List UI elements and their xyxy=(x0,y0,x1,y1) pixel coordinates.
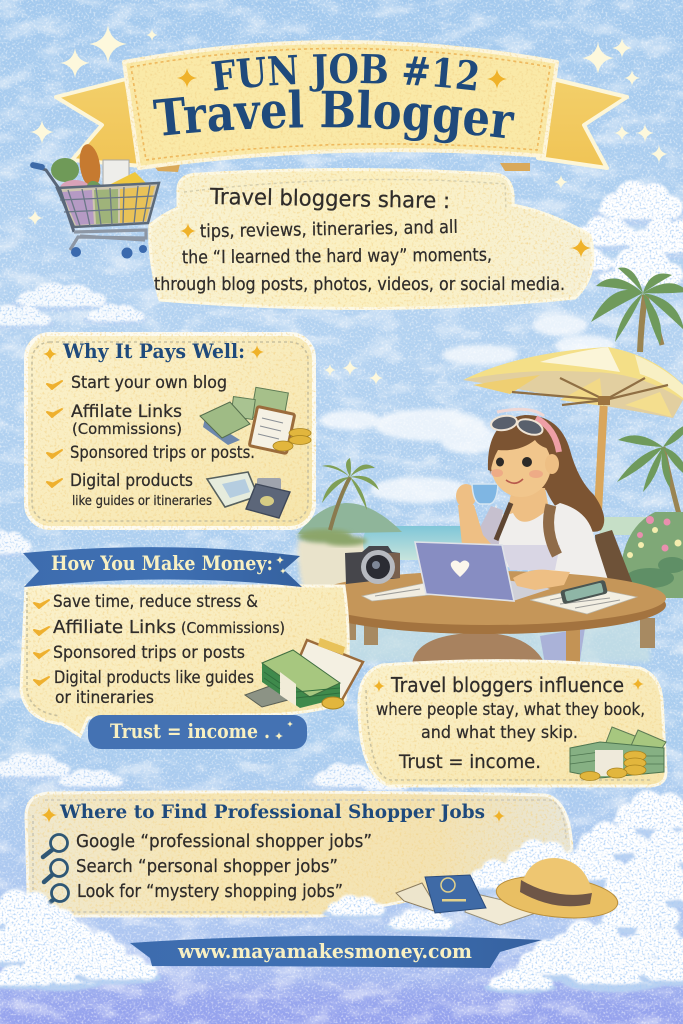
typing hand xyxy=(513,570,570,590)
papers on table xyxy=(362,583,637,614)
search lines xyxy=(76,831,372,902)
checklist: Affilate Links xyxy=(71,402,182,422)
intro line 1: tips, reviews, itineraries, and all xyxy=(200,217,458,242)
chair xyxy=(595,530,634,590)
panel: why it pays well xyxy=(26,334,314,528)
icon: passport and papers xyxy=(396,875,545,925)
distant shore xyxy=(600,517,683,535)
panel shape xyxy=(21,586,348,736)
intro panel xyxy=(150,170,593,309)
panel shape xyxy=(359,661,666,786)
checklist: Digital products xyxy=(70,471,193,491)
water below table xyxy=(335,622,650,662)
left tail xyxy=(56,79,142,166)
sea xyxy=(363,526,535,560)
checklist: Sponsored trips or posts xyxy=(53,643,245,663)
table top xyxy=(310,576,666,634)
face xyxy=(491,433,551,497)
wheels xyxy=(71,245,147,258)
intro line 2: the “I learned the hard way” moments, xyxy=(182,245,492,268)
stars xyxy=(41,807,57,823)
panel heading: Why It Pays Well: xyxy=(62,339,245,363)
icon: clipboard and cash stack xyxy=(245,638,363,709)
clouds: bottom and right xyxy=(0,790,683,993)
clouds: left side xyxy=(0,283,410,793)
sunglasses xyxy=(490,414,545,438)
stars xyxy=(373,680,385,692)
panel: where to find jobs xyxy=(26,792,572,916)
palm tree right xyxy=(617,425,683,525)
main banner xyxy=(124,42,557,168)
back hair xyxy=(488,415,604,532)
ear xyxy=(545,454,559,474)
panel heading: Where to Find Professional Shopper Jobs xyxy=(59,801,485,823)
headband xyxy=(536,418,559,452)
canopy panels xyxy=(473,375,540,394)
intro line 3: through blog posts, photos, videos, or social media. xyxy=(154,274,565,295)
panel line 1: where people stay, what they book, xyxy=(376,700,645,720)
panel: travel bloggers influence xyxy=(359,661,666,786)
sparkles xyxy=(276,556,284,564)
basket contents xyxy=(62,190,94,225)
trust pill xyxy=(88,715,307,749)
hills xyxy=(298,503,402,534)
checklist: Sponsored trips or posts. xyxy=(70,443,255,463)
right tail xyxy=(538,79,627,168)
icon: cash and coins xyxy=(570,727,666,780)
backpack straps xyxy=(496,503,511,540)
flowering bushes xyxy=(620,512,683,598)
canopy top xyxy=(463,347,683,400)
small palm tree xyxy=(322,458,379,530)
panel shape xyxy=(150,170,593,309)
title banner xyxy=(54,40,629,172)
website url: www.mayamakesmoney.com xyxy=(177,939,472,963)
basket xyxy=(57,183,159,227)
phone xyxy=(560,580,608,604)
icon: cash and clipboard xyxy=(200,387,311,454)
checklist xyxy=(47,373,255,509)
pole xyxy=(598,400,604,512)
website ribbon xyxy=(130,936,542,968)
frame xyxy=(70,230,146,250)
search lines: Search “personal shopper jobs” xyxy=(76,856,338,877)
shirt xyxy=(477,503,608,580)
ribbon heading: How You Make Money: xyxy=(51,551,273,575)
camera xyxy=(345,546,400,584)
cash stacks xyxy=(262,663,340,708)
stars xyxy=(43,347,57,361)
heading line 1: FUN JOB #12 xyxy=(211,53,478,92)
icon: straw hat xyxy=(494,858,620,923)
checklist: Start your own blog xyxy=(71,373,227,393)
heading line 2: Travel Blogger xyxy=(152,89,514,144)
panel line 2: and what they skip. xyxy=(421,723,578,743)
raised arm xyxy=(458,505,492,545)
coffee cup xyxy=(472,484,498,504)
sparkles upper sky xyxy=(27,25,668,385)
cheeks xyxy=(491,469,503,477)
woman with coffee xyxy=(412,409,608,664)
ribbon header xyxy=(23,547,302,587)
table xyxy=(310,571,666,664)
panel: how you make money xyxy=(21,547,363,749)
checklist: (Commissions) xyxy=(181,619,285,637)
eyes xyxy=(496,458,504,466)
fringe xyxy=(490,419,555,475)
neck xyxy=(505,488,552,525)
panel heading: Travel bloggers influence xyxy=(390,673,624,697)
legs xyxy=(412,633,545,664)
checklist: Digital products like guides xyxy=(54,668,254,688)
icon: guide and tablet xyxy=(207,472,290,518)
intro heading: Travel bloggers share : xyxy=(209,185,450,214)
checklist xyxy=(34,592,285,708)
canopy underside xyxy=(463,350,683,418)
checklist: Save time, reduce stress & xyxy=(53,592,258,612)
search lines: Look for “mystery shopping jobs” xyxy=(77,881,343,902)
hand xyxy=(456,484,476,508)
clouds: upper right xyxy=(556,180,683,293)
ribs xyxy=(512,378,668,405)
mouth xyxy=(506,479,523,483)
background beach scene xyxy=(298,503,683,662)
icon: shopping cart xyxy=(30,143,159,258)
clouds: mid sky xyxy=(320,314,615,503)
laptop xyxy=(415,542,550,601)
search lines: Google “professional shopper jobs” xyxy=(76,831,372,852)
beach umbrella xyxy=(463,347,683,512)
shore vegetation xyxy=(298,529,367,546)
legs xyxy=(342,618,655,648)
panel shape xyxy=(26,334,314,528)
heart logo xyxy=(451,560,469,577)
checklist: (Commissions) xyxy=(72,420,182,438)
panel line 3: Trust = income. xyxy=(398,751,541,773)
stars xyxy=(177,68,197,88)
checklist: or itineraries xyxy=(55,688,154,708)
folds xyxy=(152,164,180,172)
checklist: Affiliate Links xyxy=(53,617,176,638)
icon: magnifying glasses xyxy=(43,834,68,907)
palm tree top right xyxy=(591,268,683,352)
sand xyxy=(298,540,380,612)
panel shape xyxy=(26,792,572,916)
groceries xyxy=(51,158,79,182)
star xyxy=(180,223,196,239)
checklist: like guides or itineraries xyxy=(72,493,212,509)
trust text: Trust = income . xyxy=(110,719,270,743)
handle xyxy=(33,166,74,232)
